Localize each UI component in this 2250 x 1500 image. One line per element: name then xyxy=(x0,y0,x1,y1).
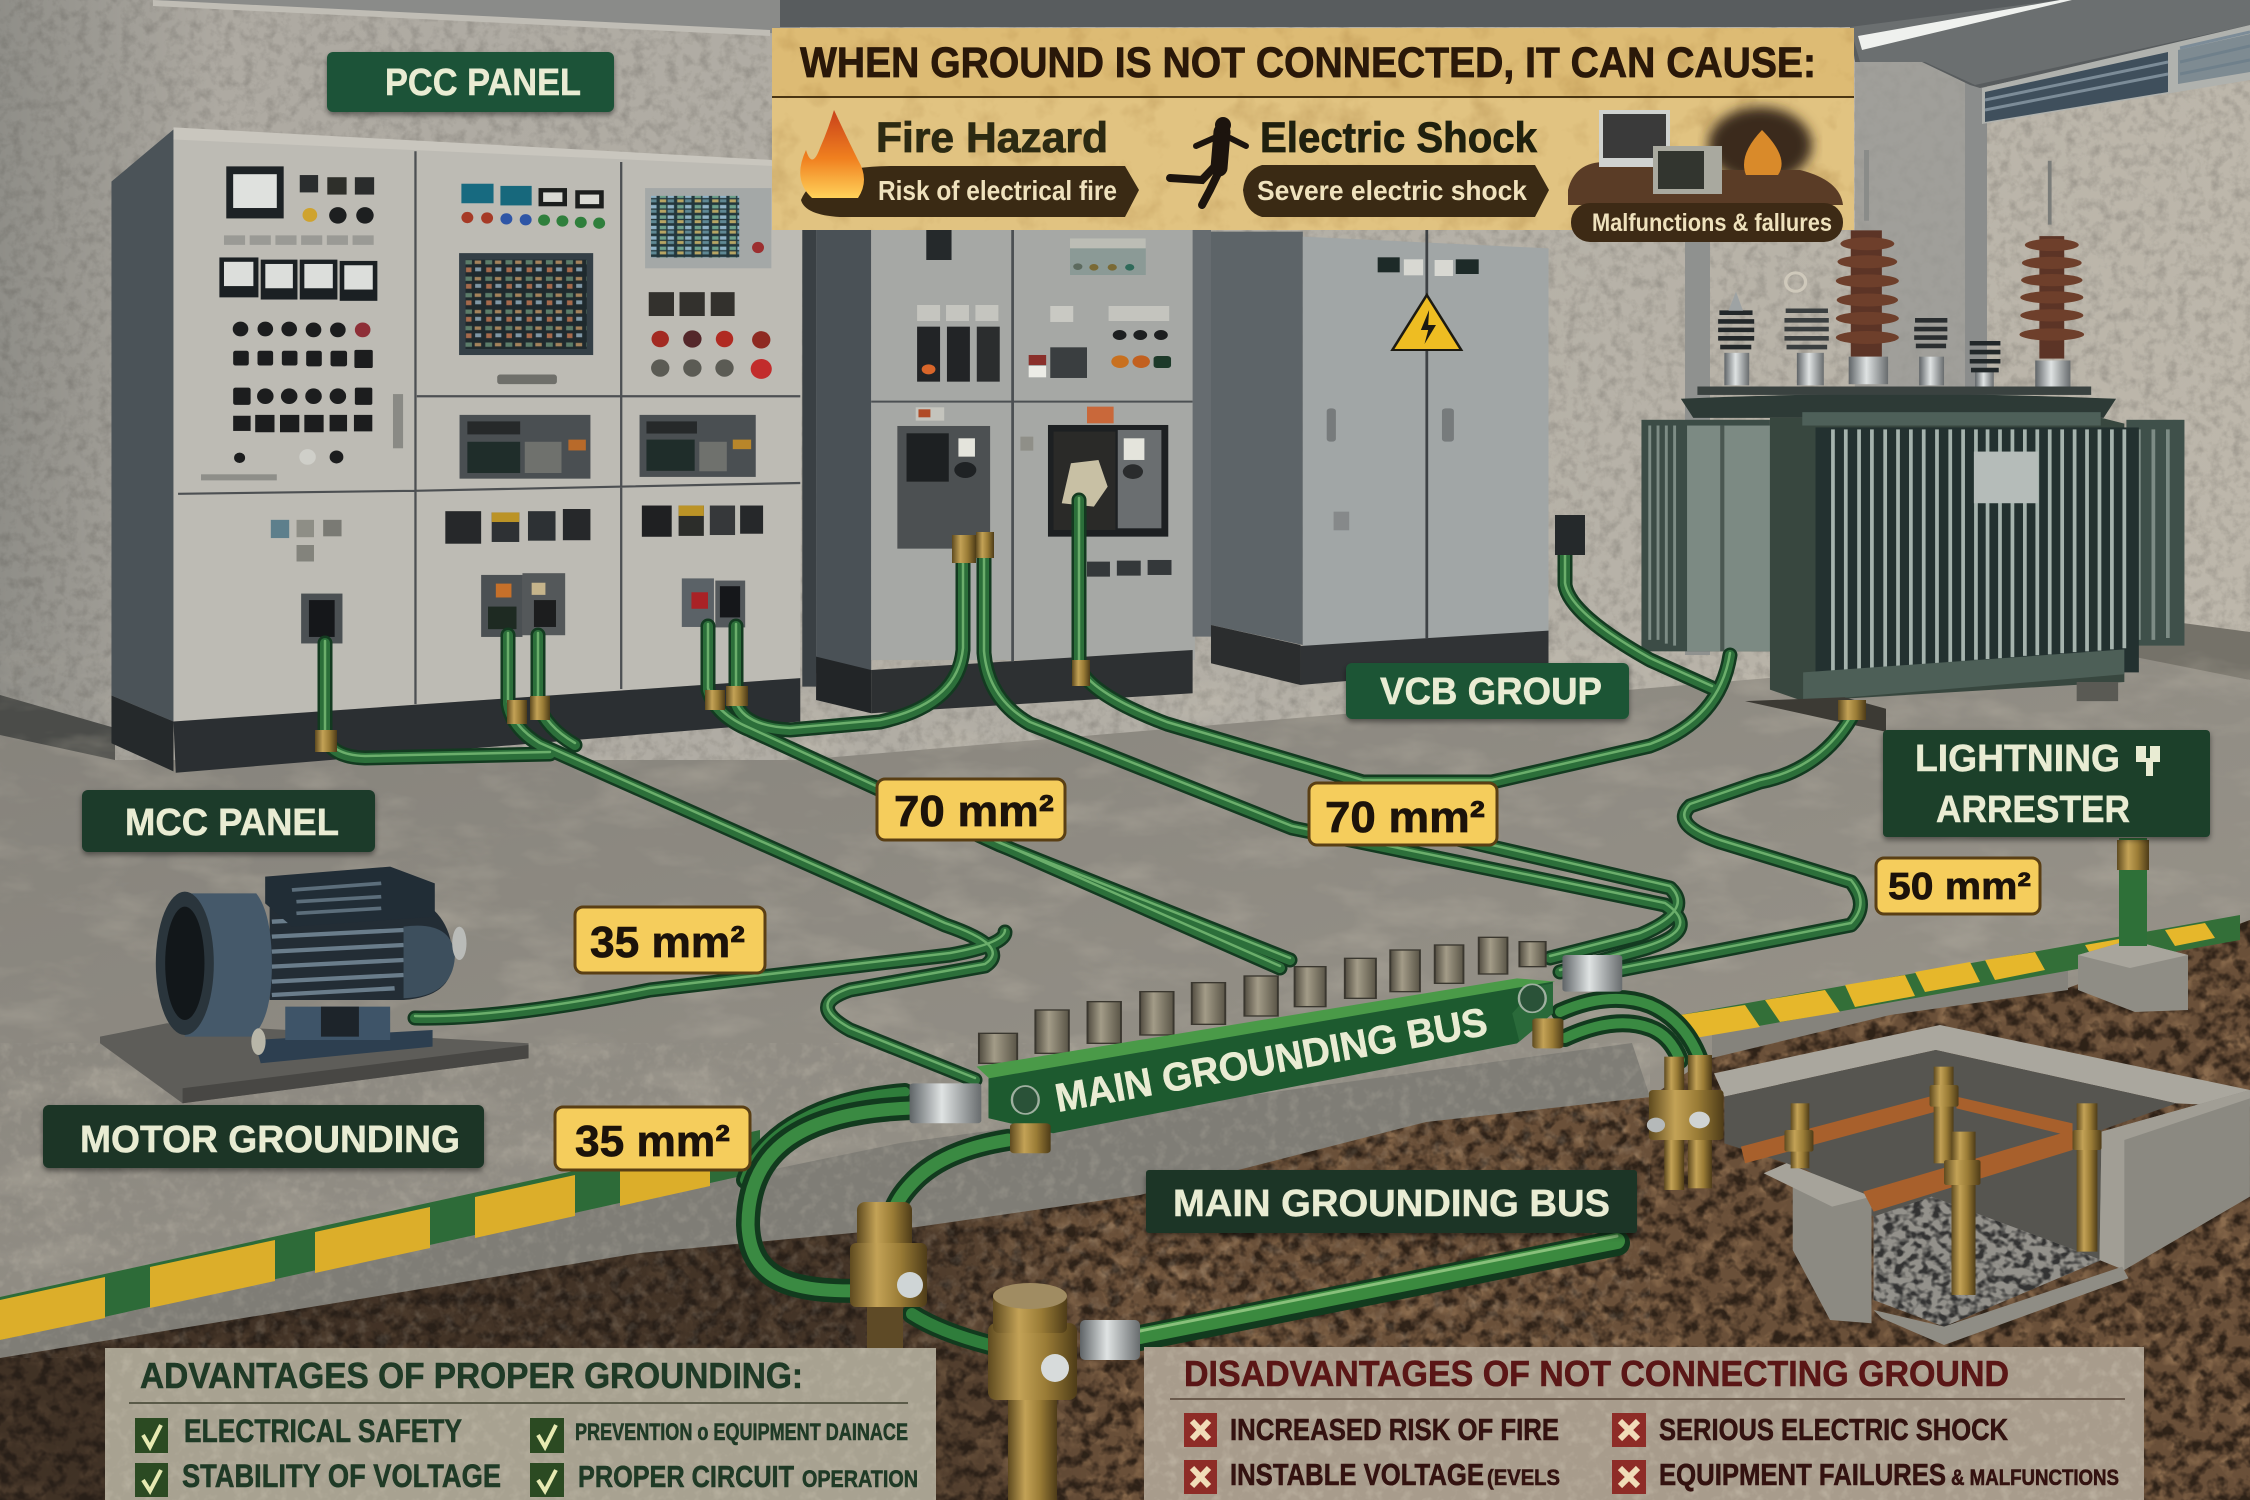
disadvantages list: & MALFUNCTIONS xyxy=(1951,1465,2119,1490)
advantages list: STABILITY OF VOLTAGE xyxy=(182,1458,501,1494)
cable size: 50 mm2: 50 mm² xyxy=(1888,866,2031,908)
fire hazard item: Risk of electrical fire xyxy=(878,175,1117,206)
cable size: 35 mm2 motor: 35 mm² xyxy=(590,918,745,967)
malfunctions and failures item xyxy=(1568,107,1843,242)
thick ground cables to electrodes xyxy=(745,999,1700,1345)
malfunctions and failures item: Malfunctions & fallures xyxy=(1592,209,1832,237)
electrode rods xyxy=(1649,1055,2102,1295)
cable size: 70 mm2 left xyxy=(877,779,1065,840)
disadvantages list: EQUIPMENT FAILURES xyxy=(1659,1457,1946,1492)
label: main grounding bus: MAIN GROUNDING BUS xyxy=(1173,1183,1610,1225)
label: VCB group xyxy=(1346,663,1629,719)
advantages list: PROPER CIRCUIT xyxy=(578,1459,794,1494)
bus bar name: MAIN GROUNDING BUS xyxy=(1052,1000,1491,1121)
fire hazard item: Fire Hazard xyxy=(876,114,1108,162)
panel lower breakers xyxy=(271,506,763,643)
label: PCC panel: PCC PANEL xyxy=(385,62,581,104)
disadvantages list: INCREASED RISK OF FIRE xyxy=(1230,1412,1559,1447)
door indicators xyxy=(1378,257,1479,276)
advantages list: ELECTRICAL SAFETY xyxy=(184,1413,462,1449)
disadvantages list: INSTABLE VOLTAGE xyxy=(1230,1457,1484,1492)
label: MCC panel: MCC PANEL xyxy=(125,802,339,844)
advantages list: OPERATION xyxy=(802,1466,918,1493)
lightning arrester insulators xyxy=(1836,150,2084,387)
grounding cables xyxy=(325,498,1860,1080)
label: lightning arrester: ARRESTER xyxy=(1936,789,2130,831)
panel screens centre xyxy=(459,184,605,479)
disadvantages heading: DISADVANTAGES OF NOT CONNECTING GROUND xyxy=(1184,1353,2009,1394)
cable size: 70 mm2 left: 70 mm² xyxy=(894,787,1054,836)
label: lightning arrester: LIGHTNING xyxy=(1915,738,2120,780)
concrete curb xyxy=(0,965,2068,1358)
panel meters left xyxy=(201,166,403,480)
hazard tape left xyxy=(0,1130,760,1340)
VCB switchgear xyxy=(802,220,1211,713)
transformer tank xyxy=(1641,387,2184,732)
cable size: 35 mm2 lower xyxy=(555,1107,750,1170)
panel: advantages of proper grounding xyxy=(105,1348,936,1500)
icon: high voltage warning triangle xyxy=(1392,295,1461,350)
label: MCC panel xyxy=(82,790,375,852)
banner title: WHEN GROUND IS NOT CONNECTED, IT CAN CAUSE: xyxy=(800,39,1816,87)
ceiling with light and vent xyxy=(0,0,2250,124)
cable size: 35 mm2 motor xyxy=(575,907,765,973)
VCB group enclosure xyxy=(1211,227,1548,685)
label: motor grounding xyxy=(43,1105,484,1168)
electric shock item xyxy=(1170,114,1549,217)
panel controls right xyxy=(640,188,772,477)
label: lightning arrester xyxy=(1883,730,2210,837)
hazard tape right xyxy=(1680,915,2240,1040)
motor xyxy=(100,867,529,1103)
electric shock item: Electric Shock xyxy=(1260,114,1537,162)
label: main grounding bus xyxy=(1146,1170,1637,1233)
cable size: 70 mm2 right xyxy=(1309,783,1497,845)
banner: when ground is not connected xyxy=(772,28,1854,242)
transformer bushings xyxy=(1718,273,2000,387)
cable size: 35 mm2 lower: 35 mm² xyxy=(575,1117,730,1166)
PCC panel switchboard xyxy=(111,127,803,773)
cable size: 50 mm2 xyxy=(1876,858,2040,914)
fire hazard item xyxy=(800,110,1139,217)
copper ground grid xyxy=(1741,1095,2073,1212)
grounding pit with electrodes xyxy=(1647,1025,2250,1345)
advantages list xyxy=(135,1413,918,1497)
wall background xyxy=(0,0,2250,760)
disadvantages list xyxy=(1184,1412,2119,1494)
panel: disadvantages of not connecting ground xyxy=(1144,1347,2144,1500)
label: VCB group: VCB GROUP xyxy=(1380,671,1602,713)
lightning arrester ground post xyxy=(2078,838,2188,1012)
label: PCC panel xyxy=(327,52,614,112)
advantages list: PREVENTION o EQUIPMENT DAINACE xyxy=(575,1419,908,1446)
disadvantages list: (EVELS xyxy=(1487,1465,1560,1490)
ground electrode clamps xyxy=(850,1202,1140,1500)
bus terminal connectors xyxy=(910,937,1622,1153)
door handles xyxy=(1327,408,1454,530)
VCB right instruments xyxy=(1020,238,1171,577)
main grounding bus bar xyxy=(910,937,1622,1153)
VCB left instruments xyxy=(897,230,1000,549)
transformer xyxy=(1641,150,2184,732)
excavated soil xyxy=(0,900,2250,1500)
advantages heading: ADVANTAGES OF PROPER GROUNDING: xyxy=(140,1355,803,1396)
cable terminal lugs xyxy=(315,515,1866,752)
concrete floor xyxy=(0,650,2250,1360)
disadvantages list: SERIOUS ELECTRIC SHOCK xyxy=(1659,1412,2008,1447)
cable size: 70 mm2 right: 70 mm² xyxy=(1325,793,1485,842)
electric shock item: Severe electric shock xyxy=(1257,175,1527,206)
label: motor grounding: MOTOR GROUNDING xyxy=(80,1119,460,1161)
